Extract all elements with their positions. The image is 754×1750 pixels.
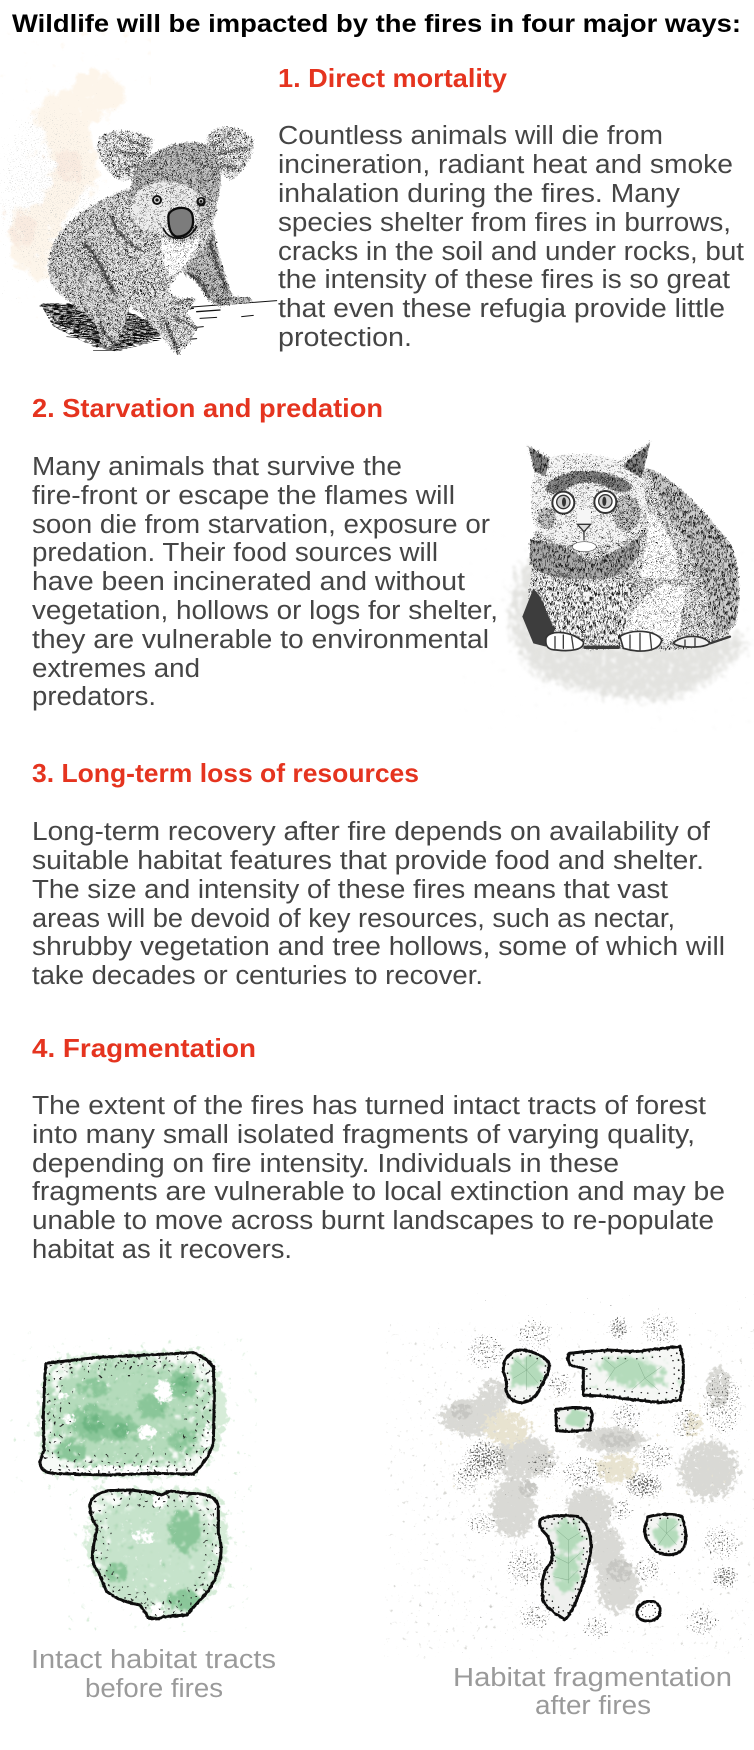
- heading: fragmentation: 4. Fragmentation: [32, 1033, 256, 1063]
- ground shadow: [508, 553, 749, 702]
- text block: direct mortality: protection.: [278, 324, 412, 352]
- caption: habitat fragmentation: Habitat fragmentation: [453, 1664, 732, 1692]
- text block: starvation and predation: fire-front or escape the flames will: [32, 482, 455, 510]
- tract one outline: [40, 1353, 214, 1475]
- dark fold: [522, 588, 557, 647]
- tan washes: [475, 1405, 706, 1488]
- branch under koala: [40, 301, 277, 352]
- koala face: [130, 182, 217, 235]
- text block: starvation and predation: soon die from starvation, exposure or: [32, 511, 491, 539]
- ears: [528, 443, 650, 478]
- text block: fragmentation: unable to move across burnt landscapes to re-populate: [32, 1207, 714, 1235]
- text block: direct mortality: Countless animals will die from: [278, 122, 663, 150]
- map: habitat fragmentation: [432, 1310, 745, 1642]
- fragment F: [637, 1601, 660, 1621]
- tract one: [38, 1351, 216, 1477]
- lower chest fur: [532, 573, 633, 643]
- caption: intact habitat: [31, 1646, 276, 1703]
- flank highlight: [640, 510, 678, 580]
- text block: fragmentation: [32, 1092, 725, 1264]
- text block: long-term loss: [32, 818, 725, 990]
- text block: long-term loss: The size and intensity of these fires means that vast: [32, 876, 668, 904]
- koala limb shading: [85, 217, 233, 353]
- flank shading: [647, 468, 739, 637]
- koala ears: [97, 127, 253, 182]
- nose and muzzle: [572, 510, 596, 552]
- paws: [546, 631, 730, 651]
- tract two stipple: [94, 1494, 217, 1615]
- text block: long-term loss: Long-term recovery after fire depends on availability of: [32, 818, 711, 846]
- text block: direct mortality: inhalation during the fires. Many: [278, 180, 680, 208]
- fragment C: [556, 1407, 592, 1432]
- text block: starvation and predation: vegetation, hollows or logs for shelter,: [32, 597, 498, 625]
- fragment A: [503, 1350, 549, 1403]
- text block: starvation and predation: [32, 453, 498, 711]
- caption: intact habitat: Intact habitat tracts: [31, 1646, 276, 1674]
- tract one fill: [42, 1354, 214, 1474]
- panel: direct mortality: [0, 63, 744, 353]
- koala hind leg and back: [48, 188, 140, 345]
- text block: direct mortality: incineration, radiant heat and smoke: [278, 151, 733, 179]
- animal head: [526, 440, 652, 546]
- eyes: [552, 491, 616, 514]
- koala nose and mouth: [163, 208, 197, 238]
- chest ruff: [530, 537, 641, 579]
- map: intact habitat tracts: [18, 1337, 240, 1637]
- text block: direct mortality: that even these refugia provide little: [278, 295, 725, 323]
- green halo: [38, 1350, 230, 1613]
- icon: animal illustration: [508, 440, 749, 702]
- burnt speckle clusters: [450, 1310, 745, 1642]
- fragment D: [540, 1516, 591, 1619]
- fragment E: [645, 1514, 686, 1555]
- text block: long-term loss: shrubby vegetation and tree hollows, some of which will: [32, 933, 725, 961]
- text block: starvation and predation: have been incinerated and without: [32, 568, 465, 596]
- text block: fragmentation: The extent of the fires has turned intact tracts of forest: [32, 1092, 706, 1120]
- text block: direct mortality: the intensity of these fires is so great: [278, 266, 730, 294]
- koala head: [128, 142, 221, 239]
- grey burnt washes: [432, 1362, 745, 1620]
- text block: long-term loss: take decades or centuries to recover.: [32, 962, 483, 990]
- text block: fragmentation: habitat as it recovers.: [32, 1236, 292, 1264]
- front leg: [622, 583, 687, 647]
- heading: long-term loss: 3. Long-term loss of resources: [32, 758, 419, 788]
- text block: direct mortality: cracks in the soil and under rocks, but: [278, 238, 744, 266]
- heading: direct mortality: 1. Direct mortality: [278, 63, 508, 93]
- text block: starvation and predation: Many animals that survive the: [32, 453, 402, 481]
- tract two outline: [90, 1490, 221, 1619]
- text block: fragmentation: into many small isolated fragments of varying quality,: [32, 1121, 695, 1149]
- text block: fragmentation: depending on fire intensity. Individuals in these: [32, 1150, 619, 1178]
- text block: starvation and predation: extremes and: [32, 655, 200, 683]
- forehead markings: [537, 471, 641, 532]
- text block: starvation and predation: predation. Their food sources will: [32, 539, 438, 567]
- animal body: [528, 467, 739, 650]
- koala back arm: [182, 227, 252, 306]
- text block: fragmentation: fragments are vulnerable to local extinction and may be: [32, 1178, 725, 1206]
- caption: habitat fragmentation: after fires: [535, 1692, 651, 1720]
- tract two: [88, 1488, 224, 1621]
- tract two fill: [92, 1492, 220, 1618]
- text block: starvation and predation: they are vulnerable to environmental: [32, 626, 489, 654]
- heading: starvation and predation: 2. Starvation and predation: [32, 393, 383, 423]
- text block: long-term loss: suitable habitat features that provide food and shelter.: [32, 847, 704, 875]
- caption: intact habitat: before fires: [85, 1675, 223, 1703]
- koala torso and front arm: [100, 193, 213, 353]
- darker washes: [448, 1402, 640, 1584]
- icon: koala illustration: [0, 70, 277, 353]
- panel: starvation and predation: [32, 393, 749, 711]
- title: Wildlife will be impacted by the fires in four major ways:: [12, 10, 741, 38]
- text block: direct mortality: [278, 122, 744, 352]
- koala chest fur: [161, 237, 200, 277]
- smoke wash behind koala: [0, 70, 127, 297]
- fragment B: [568, 1347, 683, 1403]
- panel: long-term loss of resources: [32, 758, 725, 990]
- text block: starvation and predation: predators.: [32, 683, 156, 711]
- text block: direct mortality: species shelter from fires in burrows,: [278, 209, 731, 237]
- text block: long-term loss: areas will be devoid of key resources, such as nectar,: [32, 905, 675, 933]
- caption: habitat fragmentation: [453, 1664, 732, 1720]
- koala eyes: [152, 195, 206, 206]
- tract one stipple: [45, 1356, 209, 1471]
- panel: fragmentation: [32, 1033, 725, 1264]
